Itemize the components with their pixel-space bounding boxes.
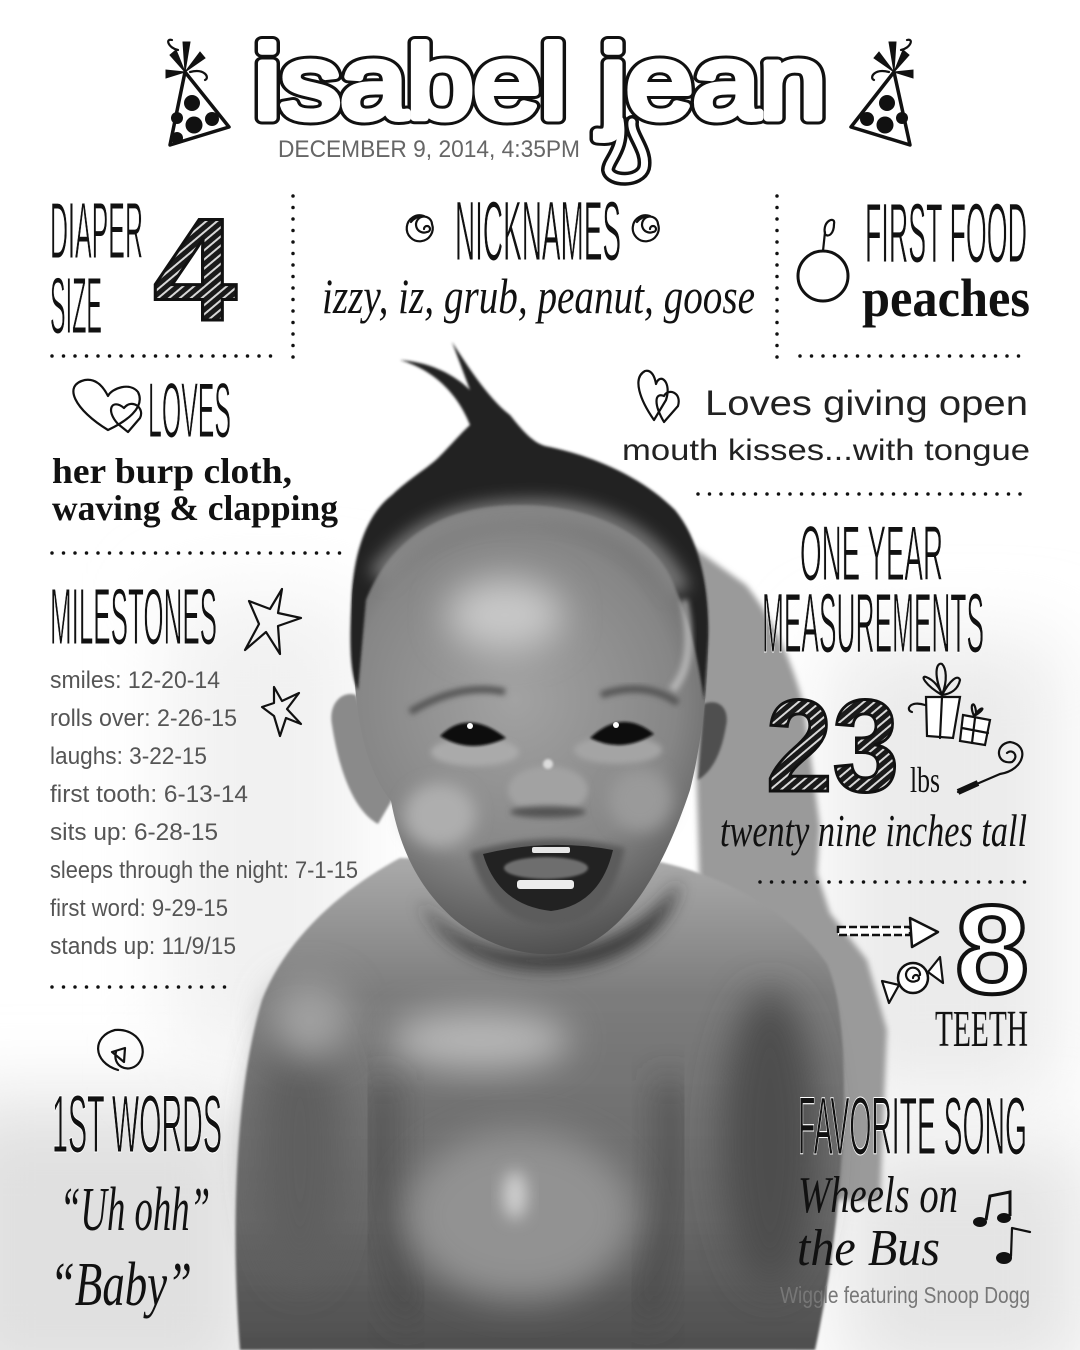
panel: loves giving kisses <box>622 371 1030 467</box>
icon: party hat left <box>166 40 229 145</box>
milestone list: sleeps through the night: 7-1-15 <box>50 857 358 884</box>
panel: diaper size: DIAPER <box>50 186 143 275</box>
number 4: 4 <box>153 188 237 351</box>
panel: favorite song <box>780 1081 1030 1308</box>
panel: diaper size <box>50 186 237 351</box>
milestone list <box>50 667 358 960</box>
icon: small star <box>262 687 301 736</box>
icon: hearts <box>73 380 141 432</box>
icon: large star <box>245 589 301 654</box>
panel: teeth <box>838 879 1029 1058</box>
panel: one year measurements: lbs <box>910 760 940 800</box>
icon: speech swirl <box>98 1030 143 1070</box>
panel: nicknames <box>322 184 755 324</box>
number 8: 8 <box>955 879 1029 1020</box>
icon: candy <box>882 957 943 1003</box>
icon: music notes <box>973 1192 1030 1264</box>
milestone list: sits up: 6-28-15 <box>50 819 218 846</box>
panel: loves giving kisses: Loves giving open <box>705 384 1028 423</box>
dividers <box>52 196 1030 987</box>
panel: first food: peaches <box>862 268 1030 328</box>
title: isabel jean: isabel jean <box>254 25 826 141</box>
text: 1ST WORDS <box>52 1079 222 1170</box>
icon: arrow <box>838 918 938 947</box>
panel: diaper size: SIZE <box>50 261 102 350</box>
panel: loves: her burp cloth, <box>52 451 292 491</box>
panel: loves <box>52 366 338 528</box>
panel: first food <box>798 186 1030 328</box>
panel: milestones <box>50 572 358 960</box>
icon: peach <box>798 220 848 301</box>
milestone list: first word: 9-29-15 <box>50 895 228 922</box>
panel: nicknames: NICKNAMES <box>455 184 621 278</box>
milestone list: laughs: 3-22-15 <box>50 743 207 770</box>
icon: hearts outline <box>638 371 679 422</box>
panel: milestones: MILESTONES <box>50 572 217 661</box>
panel: one year measurements <box>720 509 1027 856</box>
panel: first words <box>50 1030 222 1319</box>
panel: favorite song: the Bus <box>797 1220 940 1277</box>
milestone list: stands up: 11/9/15 <box>50 933 236 960</box>
panel: loves: LOVES <box>148 366 231 454</box>
icon: party blower <box>958 742 1022 792</box>
milestone list: smiles: 12-20-14 <box>50 667 220 694</box>
title: isabel jean: isabel jean <box>254 25 826 141</box>
milestone list: first tooth: 6-13-14 <box>50 781 248 808</box>
icon: swirl left <box>407 215 433 241</box>
panel: loves: waving & clapping <box>52 488 338 528</box>
milestone list: rolls over: 2-26-15 <box>50 705 237 732</box>
icon: party hat right <box>851 40 913 145</box>
panel: first words: “Uh ohh” <box>60 1176 210 1244</box>
date of birth: DECEMBER 9, 2014, 4:35PM <box>278 136 580 163</box>
panel: loves giving kisses: mouth kisses...with tongue <box>622 434 1030 467</box>
panel: nicknames: izzy, iz, grub, peanut, goose <box>322 268 755 324</box>
icon: swirl right <box>633 215 659 241</box>
title: isabel jean <box>254 25 826 179</box>
icon: gifts <box>909 664 990 745</box>
number 23: 23 <box>766 672 899 819</box>
panel: favorite song: Wheels on <box>798 1167 958 1224</box>
panel: first words: “Baby” <box>50 1251 192 1319</box>
panel: favorite song: Wiggle featuring Snoop Dogg <box>780 1282 1030 1308</box>
